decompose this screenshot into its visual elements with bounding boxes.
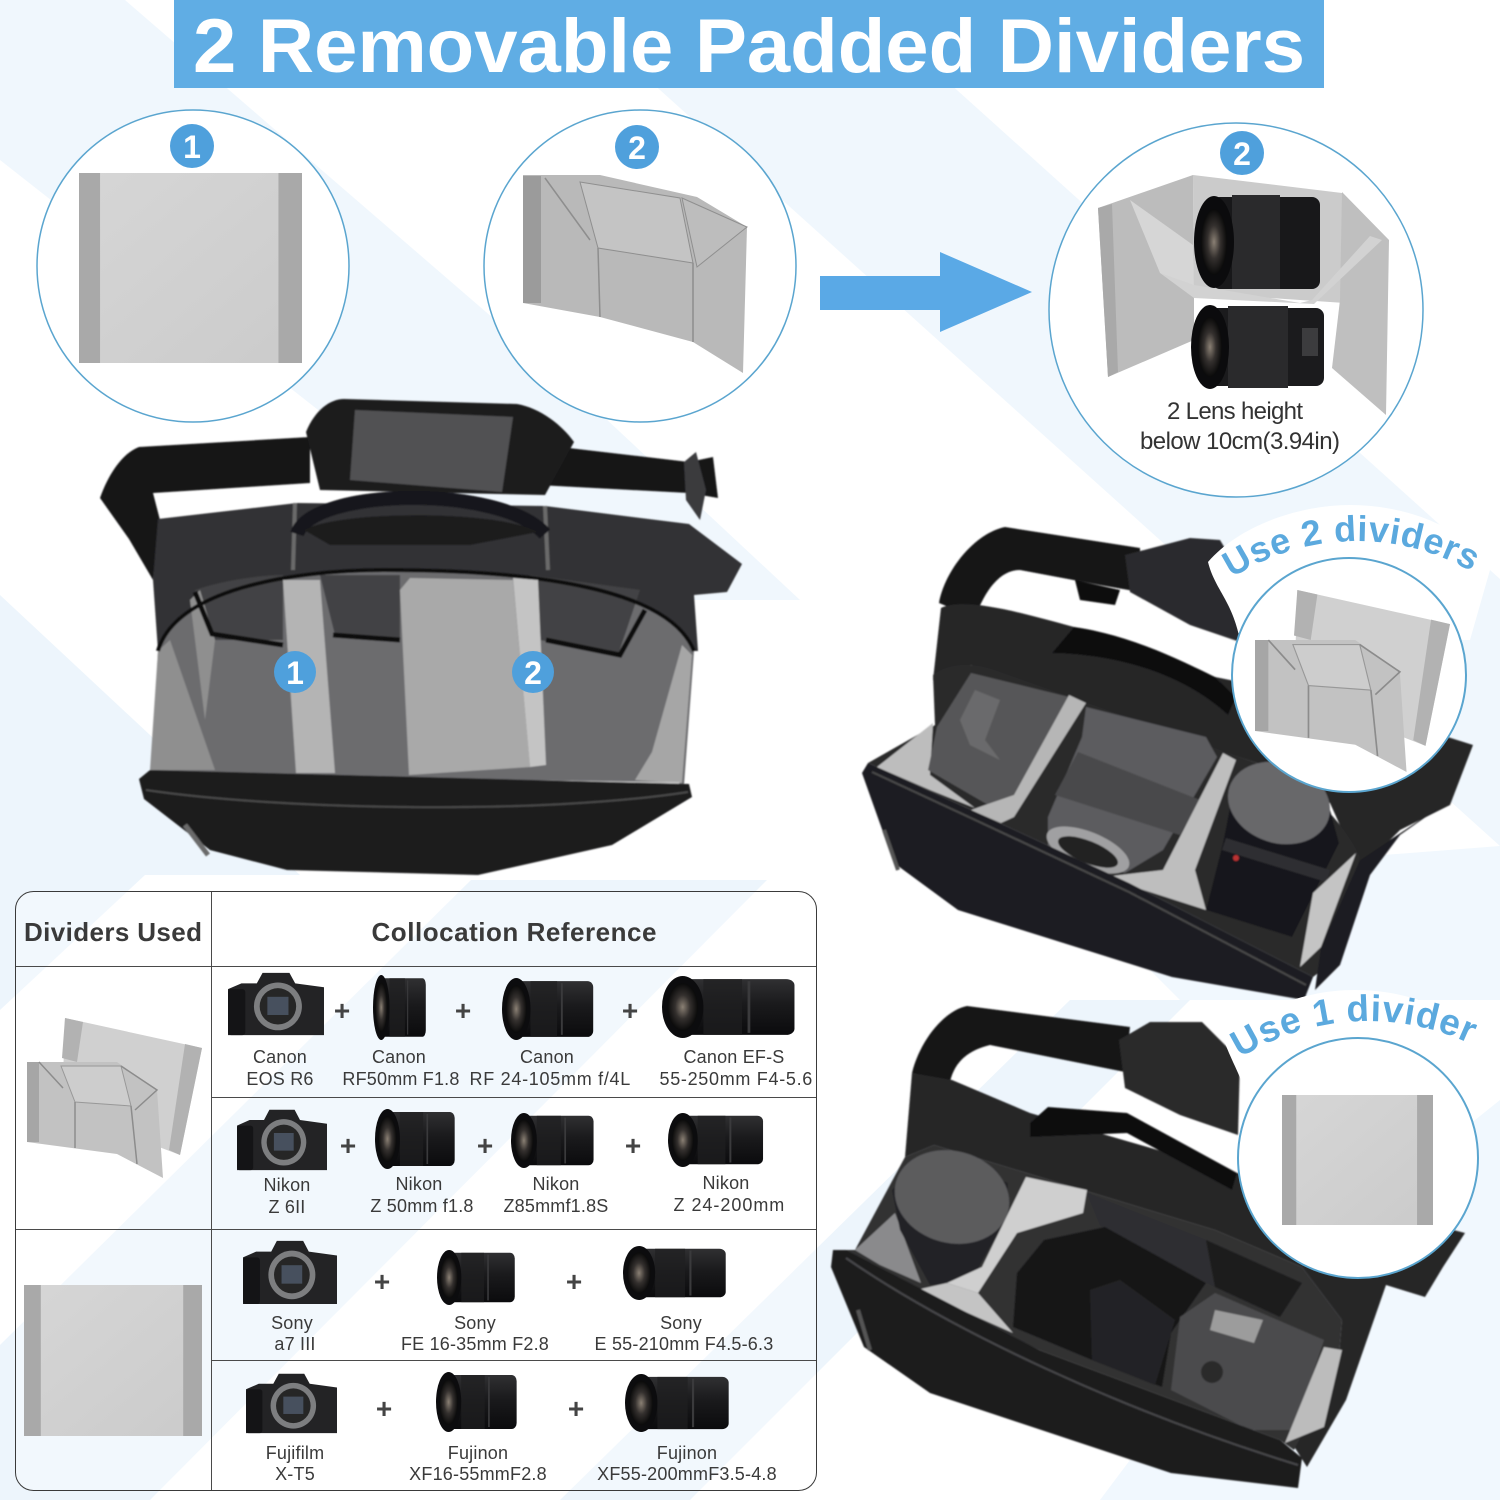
- divider 2: [400, 578, 530, 775]
- row: Nikon: +: [625, 1130, 641, 1161]
- folded divider 2: [523, 175, 747, 373]
- circle panel 1: flat divider: [37, 110, 349, 422]
- divider 1: [283, 580, 335, 773]
- badge 1: [170, 124, 214, 168]
- badge 2: 2: [628, 130, 646, 166]
- open divider: [1098, 175, 1389, 415]
- row: Sony: Sony: [660, 1313, 702, 1333]
- row: Fujifilm: Fujinon: [657, 1443, 717, 1463]
- rear lens: [892, 1153, 1008, 1285]
- row: Nikon: +: [340, 1130, 356, 1161]
- right light flap: [1285, 1347, 1342, 1443]
- buckle loop: [1075, 580, 1120, 605]
- lens left: [928, 673, 1069, 810]
- front bag photo: [100, 399, 742, 875]
- large lens hood: [1013, 1227, 1206, 1387]
- angled bag photo: use 2 dividers: [862, 527, 1473, 1000]
- upper body: [933, 604, 1473, 870]
- camera grip top: [1206, 1240, 1302, 1317]
- use 2 dividers callout: [1221, 514, 1477, 793]
- camera body: [1171, 1293, 1324, 1430]
- row: Nikon: Z 50mm f1.8: [370, 1196, 474, 1216]
- handle pad: [306, 399, 574, 495]
- row: Nikon: Nikon: [532, 1174, 580, 1194]
- lower lid: [139, 770, 692, 875]
- row: Nikon: Z 6II: [268, 1197, 306, 1217]
- divider 1: [971, 695, 1086, 823]
- row: Sony: [243, 1241, 773, 1354]
- lens height note: [1140, 398, 1340, 455]
- row: Canon: +: [455, 995, 471, 1026]
- compatibility table: [16, 892, 816, 1490]
- white backing for curved label: use 2 dividers: [1208, 505, 1490, 640]
- strap left: [100, 437, 310, 580]
- zip arch: [158, 570, 694, 651]
- row: Canon: RF 24-105mm f/4L: [470, 1069, 630, 1089]
- badge 1 on bag: 1: [286, 655, 304, 691]
- divider 2: [1103, 753, 1236, 910]
- title banner: 2 Removable Padded Dividers: [193, 4, 1305, 89]
- row: Fujifilm: X-T5: [275, 1464, 315, 1484]
- row: Sony: E 55-210mm F4.5-6.3: [595, 1334, 773, 1354]
- row: Canon: Canon: [520, 1047, 574, 1067]
- strap right: [500, 440, 718, 498]
- row: Fujifilm: +: [376, 1393, 392, 1424]
- lens lower: [1191, 305, 1324, 389]
- row: Sony: +: [566, 1266, 582, 1297]
- row: Fujifilm: Fujifilm: [266, 1443, 324, 1463]
- use 1 divider callout: [1229, 994, 1479, 1279]
- badge 2: [615, 125, 659, 169]
- row: Canon: RF50mm F1.8: [342, 1069, 460, 1089]
- flat divider 1: [79, 173, 302, 363]
- handle: [1052, 627, 1236, 715]
- badge 1: 1: [183, 129, 201, 165]
- row: Fujifilm: XF16-55mmF2.8: [409, 1464, 547, 1484]
- side light flaps: [150, 590, 215, 770]
- handle: [1030, 1107, 1237, 1190]
- inner dark back: [1087, 1193, 1215, 1287]
- white backing for curved label: use 1 divider: [1225, 990, 1495, 1120]
- zipper pull: [884, 830, 898, 870]
- angled bag photo: use 1 divider: [831, 1006, 1465, 1488]
- table headers: Collocation Reference: [372, 917, 656, 947]
- floor: [155, 775, 680, 800]
- upper body: [905, 1073, 1465, 1467]
- lens right: [1206, 777, 1339, 937]
- zipper pull: [858, 1310, 870, 1350]
- divider images: [24, 1018, 202, 1436]
- zipper pull: [185, 825, 208, 855]
- row: Fujifilm: +: [568, 1393, 584, 1424]
- row: Sony: a7 III: [274, 1334, 316, 1354]
- row: Canon: Canon: [253, 1047, 307, 1067]
- row: Canon: +: [334, 995, 350, 1026]
- circle panel 3: divider with lenses: [1049, 123, 1423, 497]
- row: Sony: Sony: [271, 1313, 313, 1333]
- lens middle: [1048, 707, 1217, 873]
- row: Nikon: Nikon: [263, 1175, 311, 1195]
- curved label: Use 2 dividers: [1221, 514, 1477, 574]
- shoulder pad: [1119, 1022, 1240, 1135]
- lens height note: 2 Lens height: [1167, 398, 1303, 425]
- table headers: [24, 917, 656, 947]
- row: Nikon: Z 24-200mm: [674, 1195, 784, 1215]
- row: Canon: +: [622, 995, 638, 1026]
- lid: [862, 763, 1313, 1000]
- table headers: Dividers Used: [24, 917, 202, 947]
- badge 2: 2: [1233, 136, 1251, 172]
- strap: [912, 1006, 1130, 1082]
- upper pockets: [195, 575, 640, 655]
- row: Canon: Canon: [372, 1047, 426, 1067]
- lens upper: [1194, 195, 1320, 289]
- row: Canon: 55-250mm F4-5.6: [660, 1069, 812, 1089]
- row: Nikon: Nikon: [395, 1174, 443, 1194]
- left light flap: [855, 1213, 921, 1283]
- row: Sony: Sony: [454, 1313, 496, 1333]
- shoulder pad: [1125, 538, 1250, 642]
- badge 1 on bag: [274, 651, 316, 693]
- row: Nikon: +: [477, 1130, 493, 1161]
- circle panel 2: folded divider: [484, 110, 796, 422]
- interior base: [833, 1145, 1342, 1450]
- buckle: [684, 452, 706, 520]
- badge 2 on bag: 2: [524, 655, 542, 691]
- folded pair: [1255, 590, 1450, 772]
- badge 2 on bag: [512, 651, 554, 693]
- interior: [152, 570, 694, 785]
- strap: [939, 527, 1140, 618]
- row: Fujifilm: XF55-200mmF3.5-4.8: [597, 1464, 777, 1484]
- lens height note: below 10cm(3.94in): [1140, 428, 1340, 455]
- pocket trim: [195, 592, 645, 655]
- table frame: [16, 892, 816, 1490]
- row: Nikon: Nikon: [702, 1173, 750, 1193]
- curved label: Use 1 divider: [1229, 994, 1478, 1054]
- row: Sony: +: [374, 1266, 390, 1297]
- row: Sony: FE 16-35mm F2.8: [401, 1334, 549, 1354]
- seam stitches: [293, 503, 548, 570]
- left light flap: [877, 723, 975, 808]
- row: Canon: [228, 973, 812, 1089]
- row: Fujifilm: [246, 1372, 777, 1484]
- carry handle: [297, 498, 545, 534]
- row: Fujifilm: Fujinon: [448, 1443, 508, 1463]
- row: Nikon: Z85mmf1.8S: [503, 1196, 609, 1216]
- right light flap: [1300, 853, 1356, 967]
- right back: [1315, 800, 1450, 990]
- arrow: [820, 252, 1032, 332]
- lid: [831, 1250, 1302, 1488]
- row: Nikon: [237, 1109, 784, 1217]
- badge 2: [1220, 131, 1264, 175]
- row: Canon: Canon EF-S: [683, 1047, 785, 1067]
- interior base: [868, 665, 1360, 977]
- upper body: [153, 503, 742, 651]
- light divider: [947, 1177, 1087, 1293]
- row: Canon: EOS R6: [246, 1069, 314, 1089]
- flat divider: [1282, 1095, 1433, 1225]
